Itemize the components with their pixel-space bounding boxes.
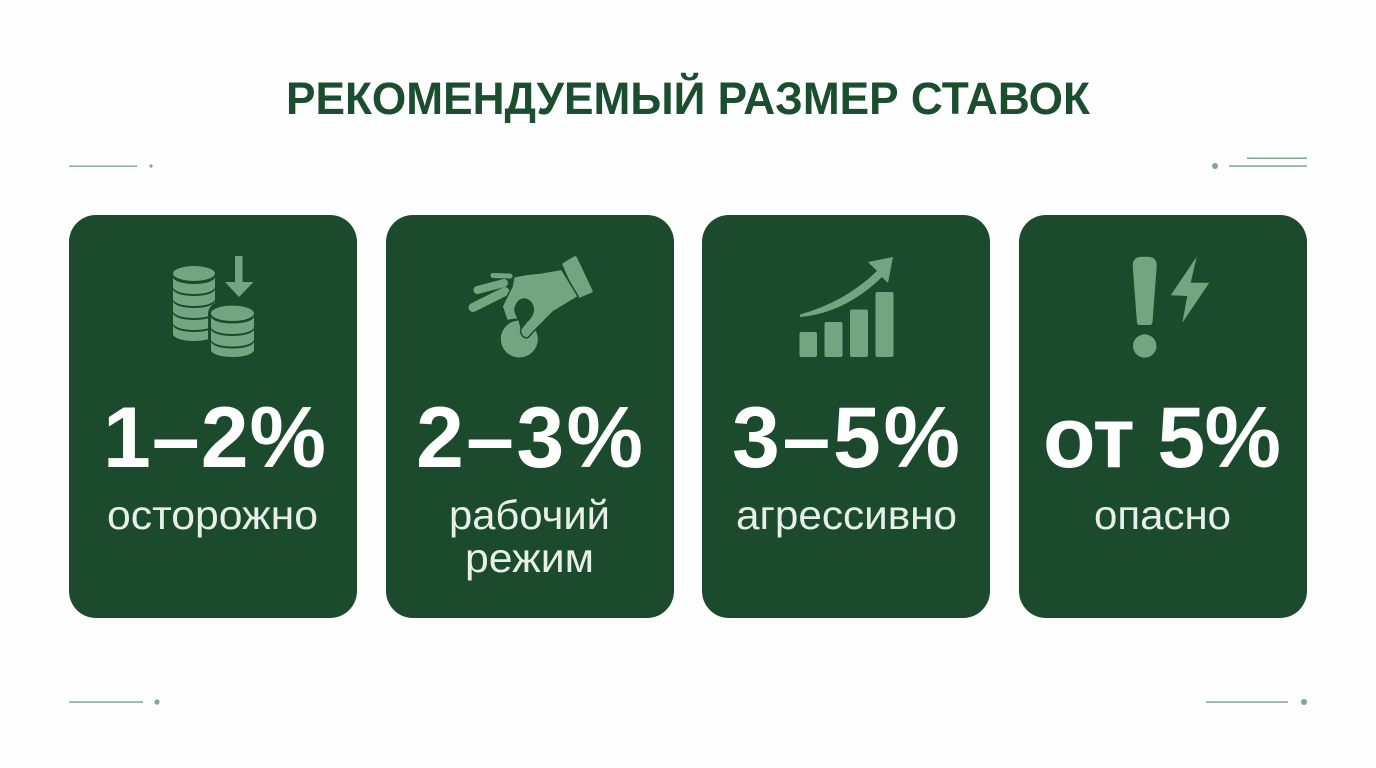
label: осторожно xyxy=(107,492,318,538)
title: РЕКОМЕНДУЕМЫЙ РАЗМЕР СТАВОК xyxy=(286,73,1091,124)
percentage: 1–2% xyxy=(103,390,326,486)
label: рабочий xyxy=(449,492,610,538)
icon: rising bars with arrow xyxy=(800,257,894,357)
panel: from 5% dangerous xyxy=(1019,215,1307,618)
panel: 2–3% working mode xyxy=(386,215,674,618)
percentage: 2–3% xyxy=(416,390,643,486)
percentage: 3–5% xyxy=(732,390,960,486)
icon: hand holding coin xyxy=(473,256,593,358)
percentage: от 5% xyxy=(1043,390,1281,486)
label second line: режим xyxy=(465,535,594,581)
label: агрессивно xyxy=(736,492,957,538)
panel: 3–5% aggressive xyxy=(702,215,990,618)
label: опасно xyxy=(1094,492,1231,538)
icon: coin stacks with down arrow xyxy=(173,256,257,360)
icon: exclamation mark and lightning xyxy=(1133,257,1209,358)
panel: 1–2% cautious xyxy=(69,215,357,618)
